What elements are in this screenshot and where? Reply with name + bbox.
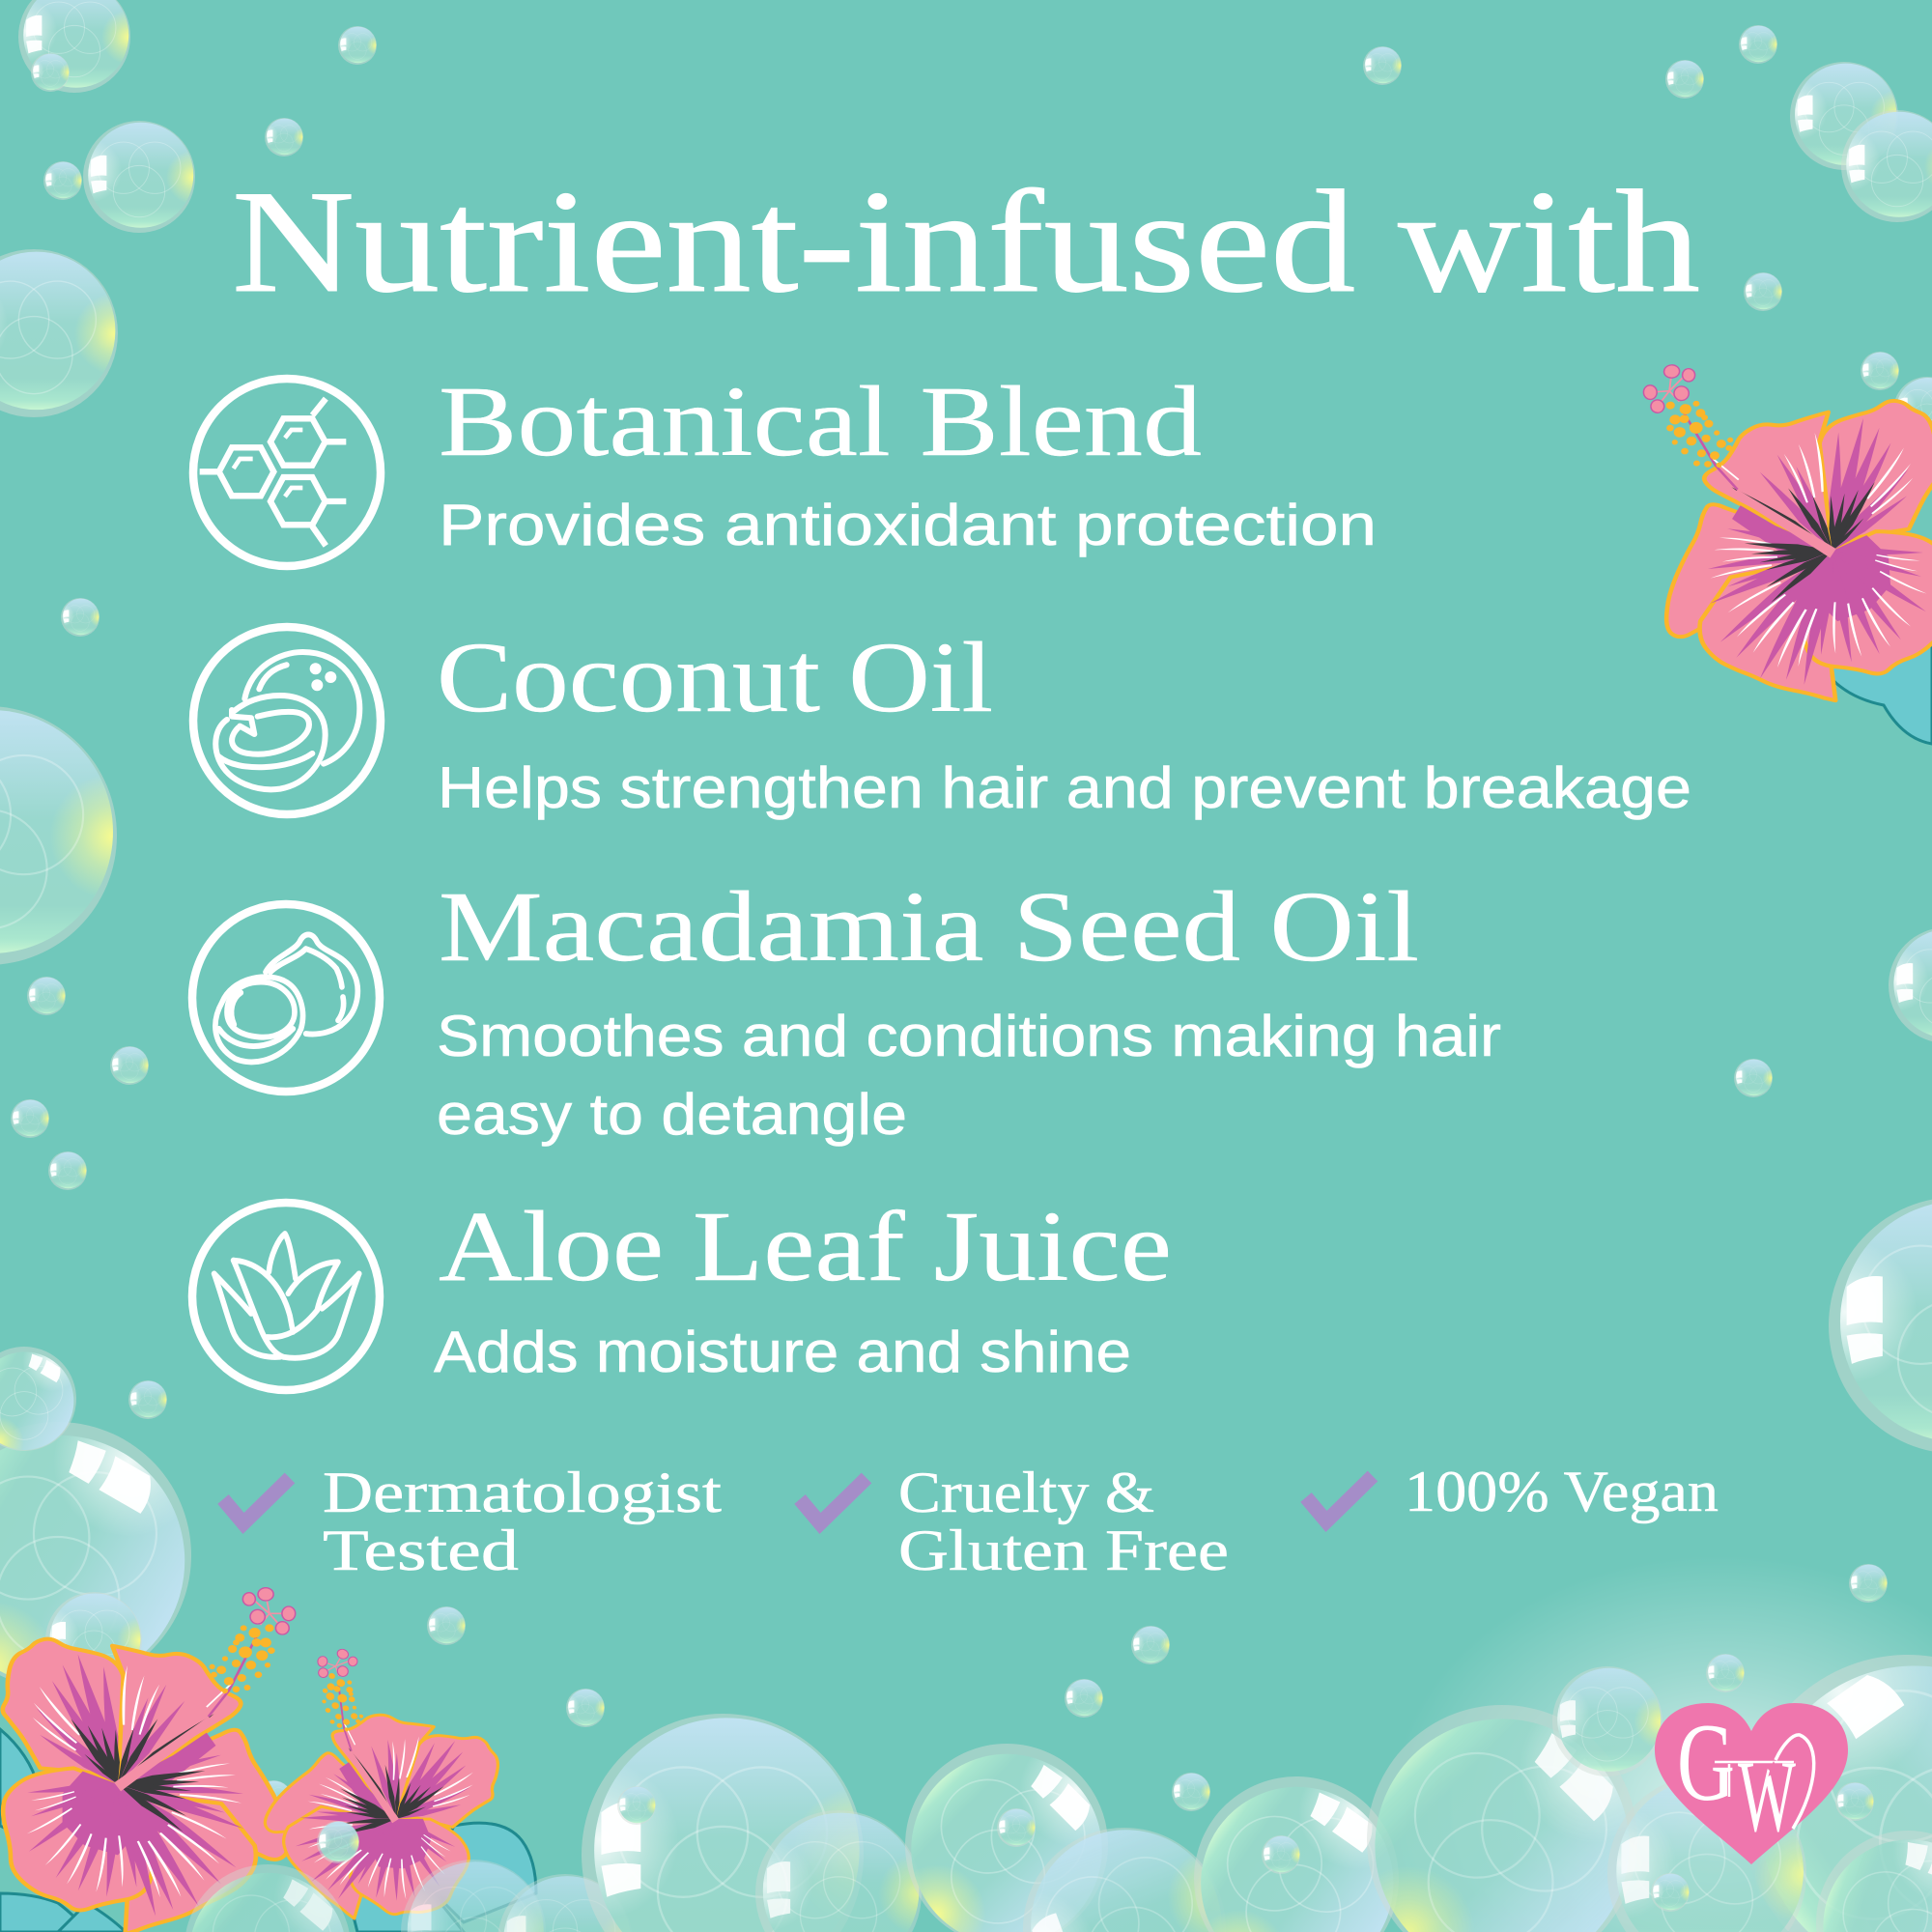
text: macadamia benefit: Smoothes and conditions making hair	[437, 1004, 1501, 1068]
heading: Macadamia Seed Oil: Macadamia Seed Oil	[439, 871, 1419, 982]
bubbles in front along the bottom	[151, 1590, 1932, 1932]
text: aloe benefit: Adds moisture and shine	[434, 1320, 1131, 1384]
flower: top right hibiscus	[1642, 347, 1932, 712]
logo: GW heart: G	[1677, 1701, 1735, 1824]
icon: coconut	[193, 627, 381, 814]
icon: purple check	[800, 1478, 867, 1523]
logo: GW heart	[1655, 1701, 1848, 1864]
text: Cruelty and Gluten Free: Gluten Free	[898, 1519, 1229, 1582]
text: Cruelty and Gluten Free: Cruelty &	[898, 1461, 1154, 1524]
ingredient: aloe leaf juice	[192, 1191, 1172, 1390]
logo: GW heart: W	[1738, 1740, 1796, 1853]
text: Dermatologist Tested: Tested	[323, 1519, 519, 1582]
bubble glow bottom right	[1391, 1555, 1932, 1932]
text: macadamia benefit: easy to detangle	[437, 1082, 907, 1147]
text: Dermatologist Tested	[323, 1461, 722, 1582]
ingredient: coconut oil	[193, 622, 1691, 820]
icon: purple check	[223, 1478, 290, 1523]
flower: small bottom hibiscus	[240, 1642, 523, 1932]
text: 100% Vegan: 100% Vegan	[1405, 1460, 1719, 1523]
icon: macadamia nuts	[192, 904, 380, 1092]
claim: dermatologist tested	[223, 1461, 722, 1582]
claim: cruelty and gluten free	[800, 1461, 1229, 1582]
text: coconut oil benefit: Helps strengthen hair and prevent breakage	[438, 755, 1691, 820]
text: botanical blend benefit: Provides antioxidant protection	[439, 493, 1377, 557]
heading: Aloe Leaf Juice: Aloe Leaf Juice	[439, 1191, 1172, 1302]
text: Dermatologist Tested: Dermatologist	[323, 1461, 722, 1524]
leaves behind flowers	[0, 638, 1932, 1932]
ingredient: macadamia seed oil	[192, 871, 1501, 1147]
ingredient: botanical blend	[193, 366, 1377, 566]
text: macadamia benefit	[437, 1004, 1501, 1147]
flower: large bottom left hibiscus	[3, 1588, 296, 1932]
heading: Botanical Blend: Botanical Blend	[439, 366, 1202, 477]
text: Cruelty and Gluten Free	[898, 1461, 1229, 1582]
icon: molecule hexagons	[193, 379, 381, 566]
icon: purple check	[1306, 1476, 1373, 1521]
claim: vegan	[1306, 1460, 1719, 1523]
heading: Coconut Oil: Coconut Oil	[437, 622, 993, 733]
title: Nutrient-infused with	[232, 160, 1700, 323]
icon: aloe plant	[192, 1203, 380, 1390]
